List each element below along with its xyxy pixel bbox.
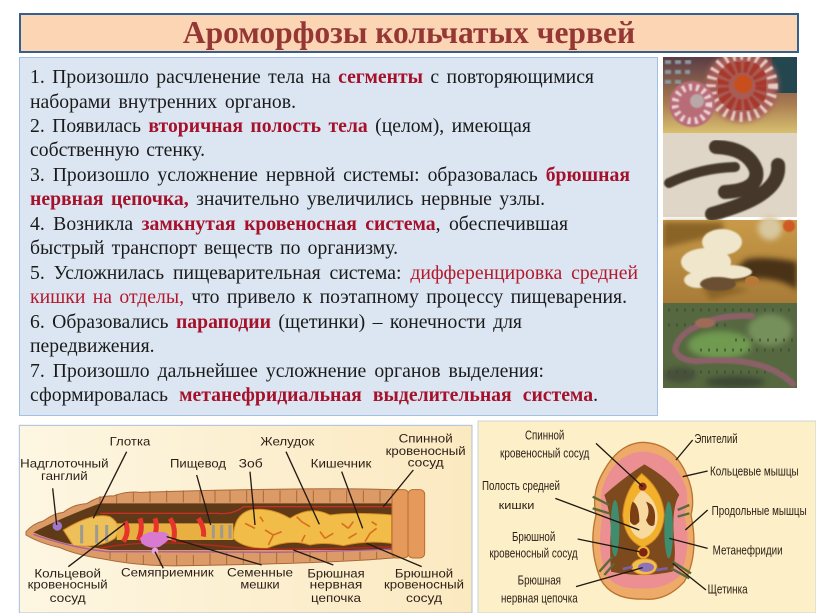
cross section body (593, 442, 694, 599)
worm labels: Семяприемник (121, 566, 214, 580)
item 4: быстрый транспорт веществ по организму. (30, 237, 398, 259)
dorsal vessel (100, 507, 393, 514)
diagram: earthworm longitudinal section (18, 424, 472, 613)
worm labels: кровеносный (386, 444, 466, 458)
item 3 (30, 164, 630, 210)
cross section labels: кишки (499, 500, 534, 512)
item 2: 2. Появилась вторичная полость тела (целом), имеющая (30, 115, 531, 137)
worm labels: Надглоточный (20, 457, 109, 471)
item 3: 3. Произошло усложнение нервной системы: образовалась брюшная (30, 164, 630, 186)
crop and gut (233, 509, 392, 548)
nephridia (611, 500, 619, 557)
gut branches (245, 517, 377, 545)
nerve cord (33, 534, 393, 552)
title (19, 13, 799, 53)
cross section labels: нервная цепочка (501, 592, 578, 606)
cross section labels: кровеносный сосуд (500, 447, 590, 461)
diagram: earthworm cross section (478, 420, 816, 613)
red hearts (123, 518, 204, 542)
item 5 (30, 262, 638, 308)
item 1 (30, 66, 594, 113)
worm labels (20, 432, 466, 605)
item 6: 6. Образовались параподии (щетинки) – конечности для (30, 311, 522, 333)
ventral vessel (100, 543, 393, 549)
worm labels: цепочка (311, 591, 361, 605)
worm labels: Желудок (260, 435, 315, 449)
worm labels: мешки (240, 577, 280, 591)
photo column (663, 57, 797, 388)
worm labels: Кишечник (311, 457, 372, 471)
worm labels: сосуд (50, 591, 86, 605)
cross section labels: Брюшной (512, 530, 555, 544)
leader lines (555, 440, 708, 590)
item 7: сформировалась метанефридиальная выделительная система. (30, 384, 598, 406)
seminal sacs (140, 532, 170, 548)
cross section labels: кровеносный сосуд (489, 547, 578, 561)
item 6 (30, 311, 522, 357)
diagram background (19, 425, 472, 613)
worm labels: сосуд (408, 456, 444, 470)
item 4: 4. Возникла замкнутая кровеносная система, обеспечившая (30, 213, 568, 235)
worm labels: кровеносный (28, 578, 108, 592)
cross section labels: Эпителий (694, 432, 738, 446)
pharynx (63, 516, 118, 546)
cross section labels: Полость средней (482, 479, 560, 493)
photo: leeches (663, 133, 797, 217)
item 5: кишки на отделы, что привело к поэтапному процессу пищеварения. (30, 286, 627, 308)
item 3: нервная цепочка, значительно увеличились нервные узлы. (30, 188, 545, 210)
worm labels: Брюшной (395, 566, 453, 580)
tail segments (392, 490, 409, 558)
photo: tube worm (663, 216, 797, 303)
ventral vessel (638, 547, 649, 558)
cross section labels (482, 428, 807, 606)
item 2 (30, 115, 531, 161)
cross section labels: Брюшная (518, 573, 561, 587)
cross section labels: Спинной (525, 428, 564, 442)
worm labels: нервная (310, 578, 362, 592)
cross section background (478, 421, 816, 613)
gut wall (623, 473, 664, 547)
worm labels: сосуд (406, 591, 442, 605)
item 1: 1. Произошло расчленение тела на сегменты с повторяющимися (30, 66, 594, 88)
worm labels: Семенные (227, 566, 293, 580)
cross section labels: Щетинка (708, 582, 748, 596)
worm labels: кровеносный (384, 578, 464, 592)
item 7 (30, 360, 598, 406)
cross section labels: Метанефридии (713, 543, 783, 557)
worm labels: Брюшная (307, 566, 365, 580)
worm labels: ганглий (41, 469, 88, 483)
parapodia (593, 497, 691, 578)
worm labels: Спинной (399, 432, 453, 446)
item 6: передвижения. (30, 335, 155, 357)
panel: list of aromorphoses (19, 57, 658, 416)
leader lines (53, 452, 422, 568)
item 1: наборами внутренних органов. (30, 91, 296, 113)
worm labels: Глотка (110, 435, 151, 449)
worm body (26, 489, 425, 566)
item 2: собственную стенку. (30, 139, 205, 161)
worm labels: Кольцевой (34, 566, 101, 580)
nerve cord (632, 559, 657, 575)
item 4 (30, 213, 568, 259)
worm labels: Пищевод (170, 457, 226, 471)
photo: fan worms (663, 50, 797, 133)
photo: earthworm (663, 303, 797, 388)
title: Ароморфозы кольчатых червей (183, 15, 635, 50)
dorsal vessel (639, 483, 647, 491)
item 7: 7. Произошло дальнейшее усложнение органов выделения: (30, 360, 544, 382)
worm labels: Зоб (239, 457, 263, 471)
ganglion (53, 521, 62, 531)
esophagus (117, 523, 233, 540)
item 5: 5. Усложнилась пищеварительная система: дифференцировка средней (30, 262, 638, 284)
